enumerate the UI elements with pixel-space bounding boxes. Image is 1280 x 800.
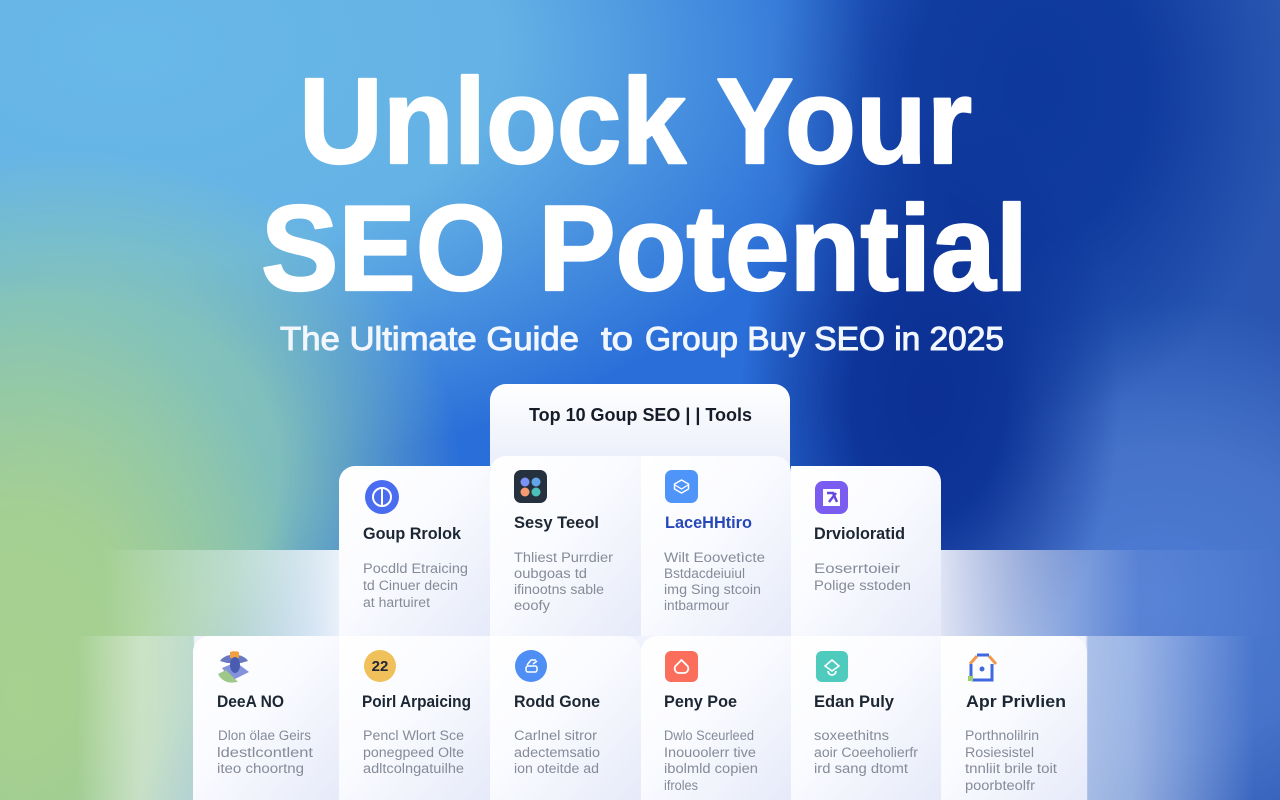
icon: yellow 22 badge: 22 <box>372 658 388 675</box>
light horizontal band behind lower cards <box>0 636 1280 800</box>
card text: Sesy Teeol <box>514 514 599 532</box>
icon: blue circle glyph <box>515 650 547 682</box>
panel: Apr Privlien <box>941 636 1087 800</box>
panel: Poirl Arpaicing <box>339 636 490 800</box>
heading: top tools: Top 10 Goup SEO | | Tools <box>529 404 752 425</box>
card text: eoofy <box>514 598 550 613</box>
icon: yellow 22 badge <box>364 650 396 682</box>
panel: Drvioloratid <box>791 466 941 636</box>
card text: ird sang dtomt <box>814 761 908 776</box>
card text: Goup Rrolok <box>363 525 462 543</box>
card text <box>814 693 919 776</box>
card text: Peny Poe <box>664 693 737 711</box>
card text: poorbteolfr <box>965 778 1036 793</box>
card text: Carlnel sitror <box>514 728 598 743</box>
icon: house <box>968 655 996 681</box>
card text <box>362 693 471 776</box>
card text <box>363 525 468 610</box>
card text: td Cinuer decin <box>363 578 458 593</box>
panel: Peny Poe <box>641 636 791 800</box>
card text: Rosiesistel <box>965 745 1034 760</box>
title: SEO Potential <box>261 180 1028 316</box>
card text: soxeethitns <box>814 728 889 743</box>
card text: Pocdld Etraicing <box>363 561 468 576</box>
icon: layered globe <box>218 651 249 683</box>
card text: Dwlo Sceurleed <box>664 728 754 743</box>
card text: ion oteitde ad <box>514 761 599 776</box>
panel: Edan Puly <box>791 636 941 800</box>
card text <box>664 514 765 613</box>
subtitle <box>280 320 1004 357</box>
card text: img Sing stcoin <box>664 582 761 597</box>
icon: purple square <box>815 481 848 514</box>
card text: Rodd Gone <box>514 693 600 711</box>
card text: Thliest Purrdier <box>514 550 614 565</box>
icon: coral square <box>665 651 698 682</box>
subtitle: to <box>601 320 633 357</box>
card text: Dlon ölae Geirs <box>218 728 311 743</box>
card text: Eoserrtoieir <box>814 561 901 576</box>
card text <box>965 693 1066 793</box>
card text: tnnliit brile toit <box>965 761 1057 776</box>
card text: Apr Privlien <box>966 693 1066 711</box>
icon: blue cube <box>665 470 698 503</box>
subtitle: Group Buy SEO in 2025 <box>645 320 1004 357</box>
card text: Bstdacdeiuiul <box>664 566 745 581</box>
card text <box>514 514 614 613</box>
card text: oubgoas td <box>514 566 587 581</box>
title: Unlock Your <box>299 53 972 189</box>
card text: DeeA NO <box>217 693 284 711</box>
card text <box>664 693 758 793</box>
subtitle: The Ultimate Guide <box>280 320 579 357</box>
card text: ifroles <box>664 778 698 793</box>
card text: at hartuiret <box>363 595 430 610</box>
card text <box>814 525 911 593</box>
card text: ibolmld copien <box>664 761 758 776</box>
light horizontal band behind upper cards <box>0 550 1280 636</box>
card text: Inouoolerr tive <box>664 745 756 760</box>
card text: intbarmour <box>664 598 730 613</box>
title <box>261 53 1028 316</box>
panel: Goup Rrolok <box>339 466 490 636</box>
card text: Edan Puly <box>814 693 895 711</box>
card text: adltcolngatuilhe <box>363 761 464 776</box>
icon: blue circle <box>365 480 399 514</box>
card text: ifinootns sable <box>514 582 604 597</box>
card text: iteo choortng <box>217 761 304 776</box>
card text: Porthnolilrin <box>965 728 1039 743</box>
card text: Drvioloratid <box>814 525 905 543</box>
panel: header card <box>490 384 790 470</box>
panel: Rodd Gone <box>490 636 641 800</box>
card text: LaceHHtiro <box>665 514 752 532</box>
panel: LaceHHtiro <box>641 456 791 636</box>
card text: aoir Coeeholierfr <box>814 745 919 760</box>
card text: Wilt Eoovetìcte <box>664 550 765 565</box>
card text: adectemsatio <box>514 745 600 760</box>
card text: Pencl Wlort Sce <box>363 728 464 743</box>
card text: Polige sstoden <box>814 578 911 593</box>
card text: Poirl Arpaicing <box>362 693 471 711</box>
card text <box>514 693 600 776</box>
panel: DeeA NO <box>193 636 339 800</box>
card text <box>217 693 313 776</box>
card text: ldestlcontlent <box>217 745 313 760</box>
panel: Sesy Teeol <box>490 456 641 636</box>
icon: teal square <box>816 651 848 682</box>
icon: four dots <box>514 470 547 503</box>
card text: ponegpeed Olte <box>363 745 464 760</box>
